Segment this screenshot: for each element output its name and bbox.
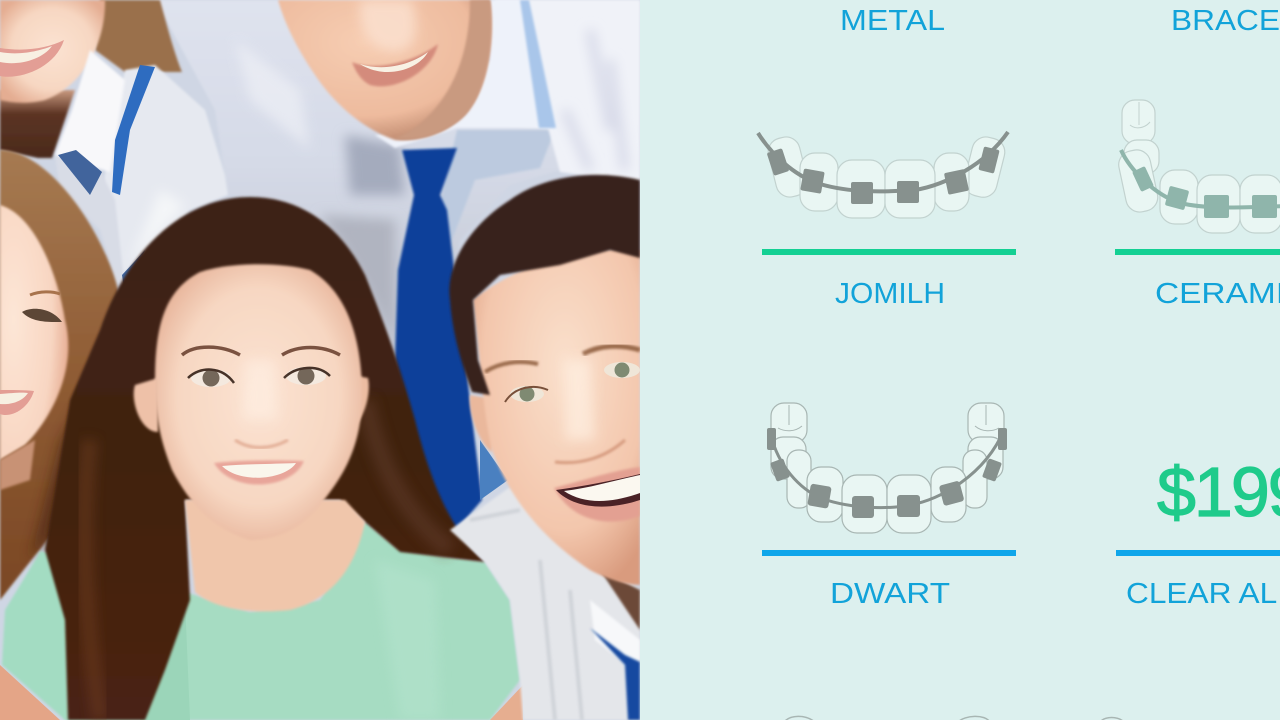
- person: man with blue tie: [155, 0, 640, 535]
- hair: [449, 175, 640, 395]
- person: woman top-left: [0, 0, 228, 295]
- icon: dwarf braces arch: [767, 403, 1007, 533]
- blue tie: [395, 148, 482, 535]
- divider bar: green: [762, 249, 1016, 255]
- arm skin: [490, 685, 523, 720]
- man's face: [278, 0, 492, 140]
- panel: group photo of smiling people: [0, 0, 640, 720]
- icon: ceramic braces arch: [1116, 100, 1280, 233]
- face: [155, 264, 362, 540]
- person: woman in the center: [0, 197, 523, 720]
- smile: [554, 467, 640, 522]
- divider bar: blue: [762, 550, 1016, 556]
- heading: BRACES: BRACE: [1171, 5, 1280, 37]
- person: woman at left with light brown hair: [0, 150, 122, 600]
- hair: [45, 197, 485, 720]
- green t-shirt: [40, 522, 520, 720]
- heading: METAL: METAL: [840, 5, 945, 37]
- eyes and brows: [182, 347, 240, 355]
- ears: [134, 378, 158, 432]
- label: CERAMIC: CERAMI: [1155, 278, 1280, 310]
- face: [473, 249, 640, 585]
- smile: [214, 460, 304, 485]
- icon: metal braces arch: [758, 132, 1008, 218]
- panel: braces comparison background: [640, 0, 1280, 720]
- nose: [235, 440, 288, 448]
- ear: [468, 394, 492, 452]
- label: JOMILH: JOMILH: [835, 278, 945, 310]
- label: DWART: DWART: [830, 578, 950, 610]
- neck: [185, 500, 365, 611]
- icon: next row arches, cropped at bottom: [784, 716, 1124, 720]
- label: CLEAR ALIGNERS: CLEAR ALI: [1126, 578, 1280, 610]
- person: man at right: [449, 175, 640, 720]
